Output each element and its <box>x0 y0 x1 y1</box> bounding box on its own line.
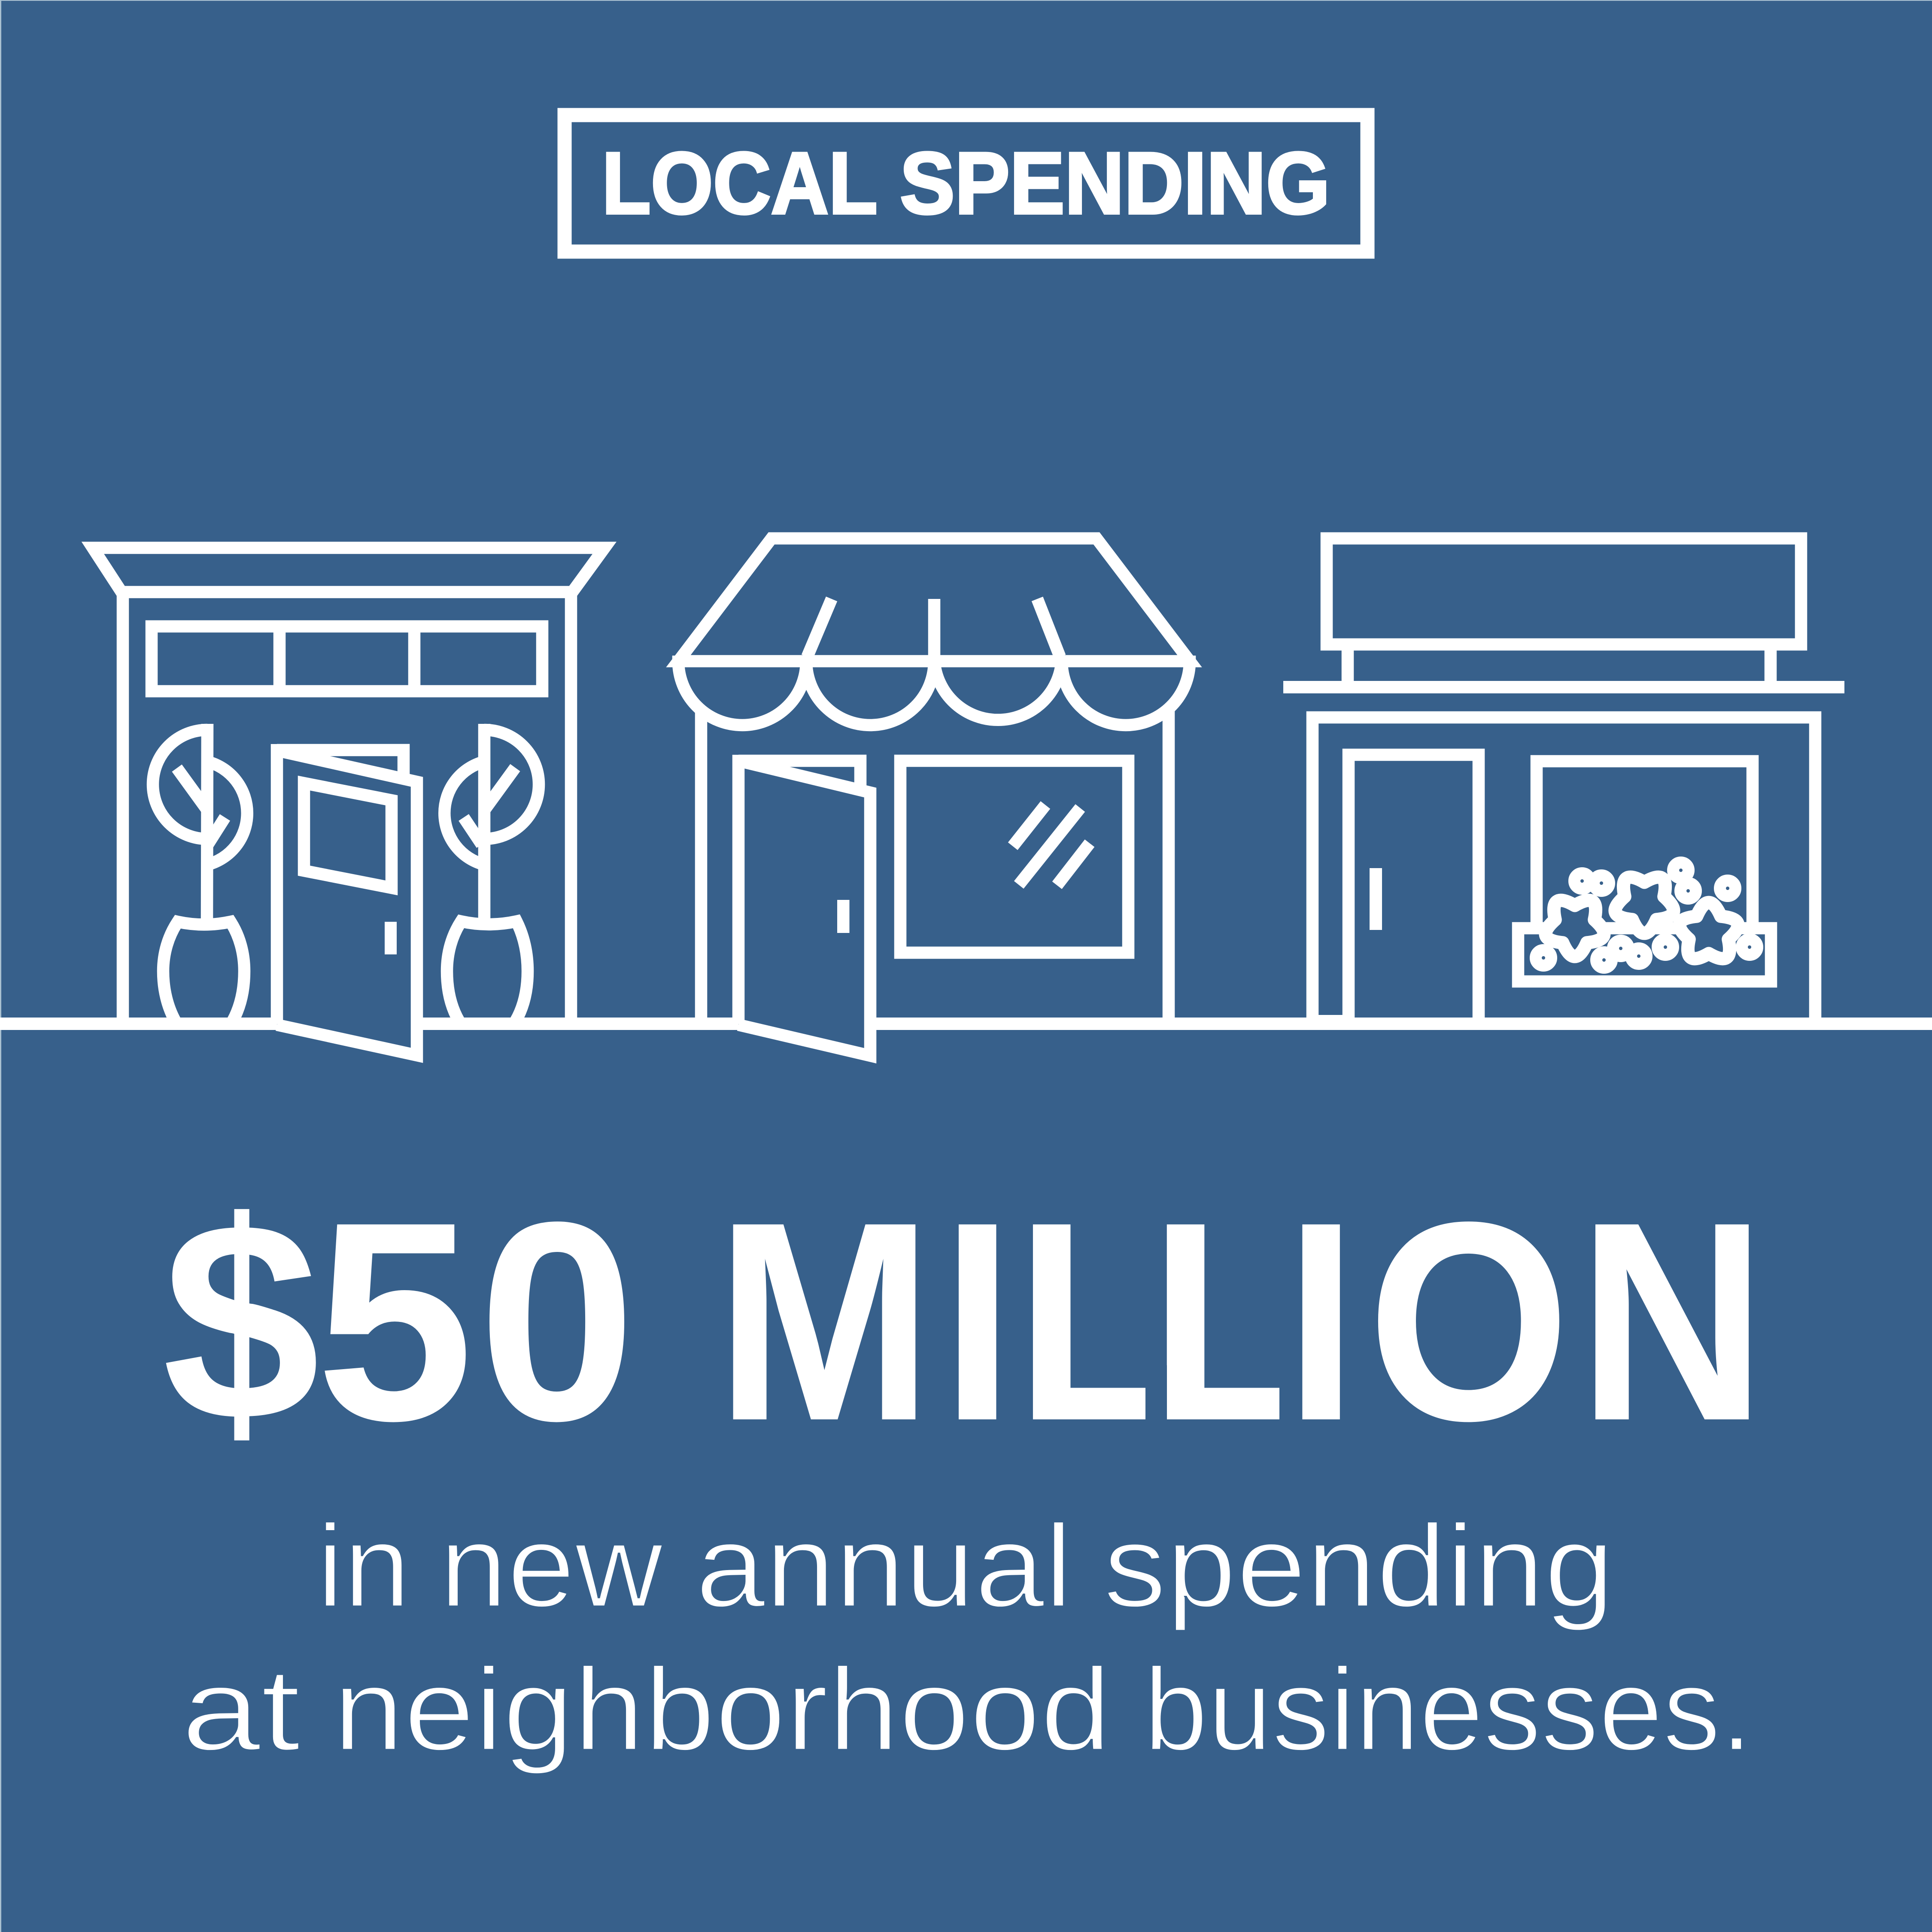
door hinge edge <box>271 744 283 1024</box>
canopy bar <box>1283 681 1844 693</box>
title: local spending badge: SPENDING <box>900 134 1330 232</box>
sign posts <box>1348 644 1771 687</box>
subtitle text: new <box>440 1501 664 1632</box>
door <box>1349 755 1479 1024</box>
open door leaf <box>277 750 417 1055</box>
headline: $50 million: MILLION <box>716 1163 1766 1480</box>
shop: right storefront with sign and flower box <box>1283 538 1844 1024</box>
shop window <box>900 761 1128 953</box>
door handle <box>385 922 397 954</box>
shop: left storefront with trees and open door <box>93 548 605 1055</box>
awning frame <box>678 538 1190 661</box>
subtitle text: spending <box>1103 1501 1614 1632</box>
door frame <box>738 761 860 788</box>
transom windows <box>152 626 542 691</box>
street ground line <box>0 1018 1932 1030</box>
flowers: dots <box>1536 863 1757 968</box>
title: local spending badge <box>565 115 1367 252</box>
window glints <box>1013 805 1090 885</box>
door handle <box>837 900 849 933</box>
door window <box>304 783 392 888</box>
building outline <box>1312 717 1815 1024</box>
flowers: stars <box>1546 877 1738 959</box>
right potted tree <box>444 724 539 1021</box>
subtitle text: annual <box>696 1501 1072 1632</box>
subtitle text <box>181 1501 1753 1776</box>
roof cornice <box>93 548 605 592</box>
title: local spending badge: LOCAL <box>602 134 878 232</box>
open door leaf <box>738 761 870 1056</box>
headline: $50 million <box>162 1163 1766 1480</box>
left potted tree <box>153 724 247 1021</box>
headline: $50 million: $50 <box>162 1163 636 1479</box>
flower box <box>1518 928 1771 981</box>
building walls <box>123 592 571 1024</box>
building walls <box>701 711 1169 1024</box>
door hinge edge <box>732 755 744 1024</box>
subtitle text: businesses. <box>1144 1644 1753 1775</box>
shop: centre storefront with scalloped awning <box>678 538 1190 1056</box>
door frame <box>277 750 404 775</box>
ground thickening by door <box>1318 1015 1343 1019</box>
door handle <box>1370 868 1382 930</box>
subtitle text: neighborhood <box>333 1644 1111 1776</box>
awning scallops <box>678 656 1190 725</box>
window <box>1537 761 1753 928</box>
blank sign <box>1327 538 1801 644</box>
subtitle text: in <box>317 1501 410 1632</box>
awning ribs <box>807 599 1060 661</box>
subtitle text: at <box>181 1644 301 1775</box>
